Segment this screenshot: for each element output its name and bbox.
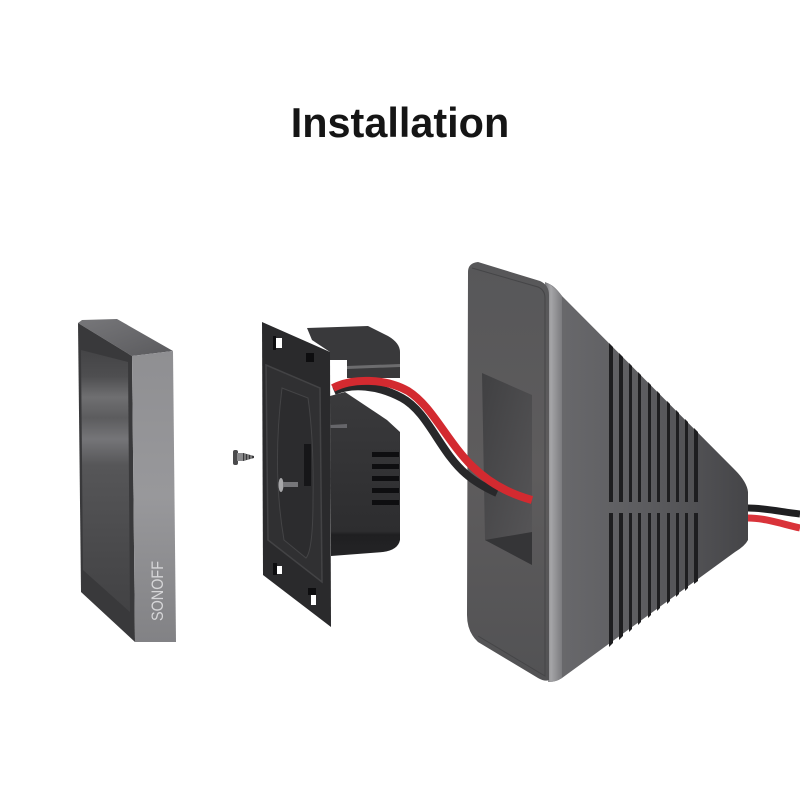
panel side edge: [132, 351, 176, 642]
box vent slots: [609, 343, 698, 647]
module vents: [372, 452, 399, 505]
red cable through box: [333, 381, 532, 500]
panel glass face: [78, 323, 135, 642]
screw seen through plate: [278, 478, 298, 492]
box silver edge: [545, 282, 562, 682]
module top bracket: [307, 326, 400, 378]
box front face: [467, 262, 549, 681]
box side: [547, 283, 748, 682]
box window: [482, 373, 532, 565]
panel top edge: [78, 319, 173, 356]
icon: mounting screw: [233, 450, 254, 465]
cone mounting box: [333, 262, 800, 682]
wall switch module: [262, 322, 400, 627]
front panel: [78, 319, 176, 642]
module body: [330, 392, 400, 556]
title: Installation: [291, 100, 509, 146]
output cables: [748, 508, 800, 528]
plate cut-outs: [276, 338, 316, 605]
panel logo: SONOFF: [148, 561, 167, 621]
mounting plate: [262, 322, 331, 627]
